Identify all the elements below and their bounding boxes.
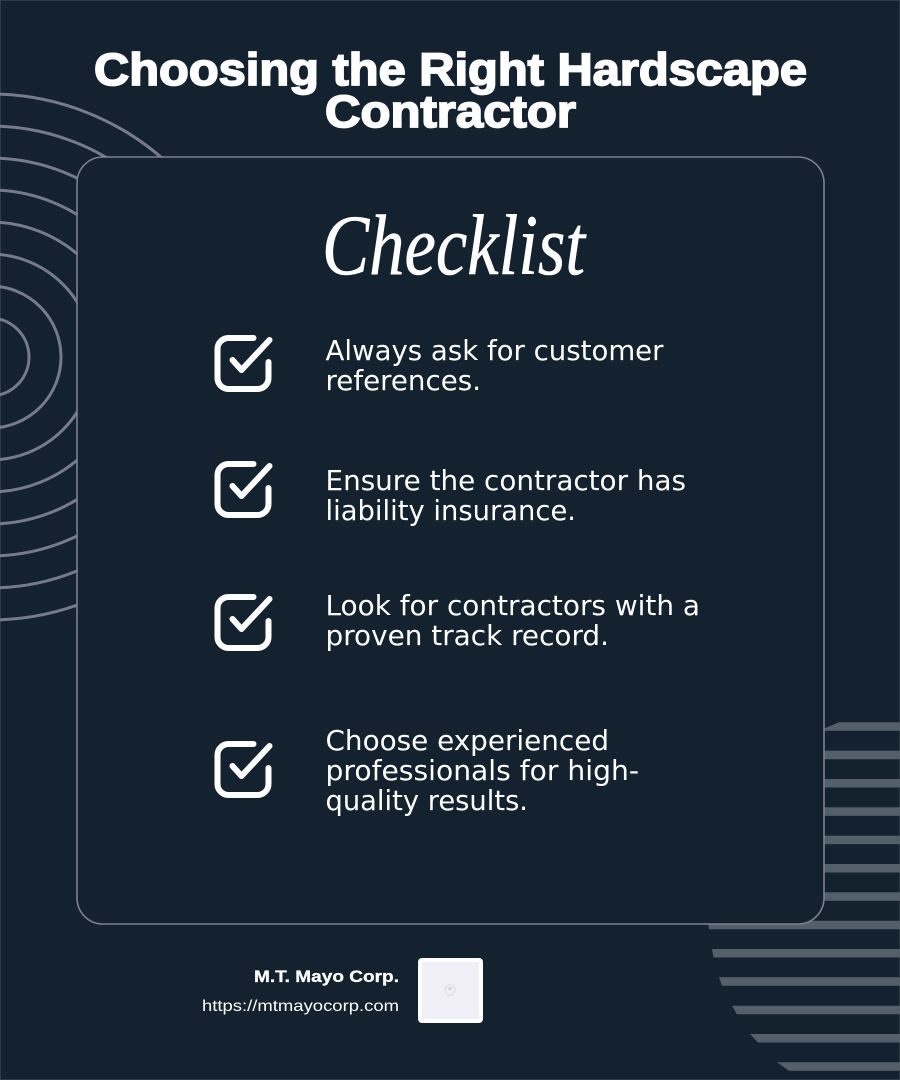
text: item 1 <box>326 334 664 397</box>
footer: company details: M.T. Mayo Corp. <box>254 967 399 986</box>
item 4 <box>218 724 639 817</box>
item 2 <box>218 464 686 527</box>
icon: checkbox 4 <box>218 744 270 795</box>
text: item 3: proven track record. <box>326 619 609 652</box>
text: item 4: quality results. <box>326 784 528 817</box>
icon: checkbox 3 <box>218 597 270 648</box>
icon: checkbox 1 <box>218 338 270 389</box>
title: Contractor <box>325 86 576 137</box>
text: item 2: liability insurance. <box>326 494 576 527</box>
text: item 4 <box>326 724 639 817</box>
item 3 <box>218 589 700 652</box>
text: item 4: Choose experienced <box>326 724 609 757</box>
icon: checkbox 2 <box>218 464 270 515</box>
checklist heading: Checklist <box>322 197 587 293</box>
footer: logo tile <box>418 958 483 1023</box>
text: item 4: professionals for high- <box>326 754 639 787</box>
text: item 2: Ensure the contractor has <box>326 464 686 497</box>
text: item 2 <box>326 464 686 527</box>
footer: company details <box>202 967 399 1015</box>
footer: company details: https://mtmayocorp.com <box>202 998 399 1015</box>
text: item 1: Always ask for customer <box>326 334 664 367</box>
item 1 <box>218 334 664 397</box>
decorative concentric arcs <box>0 94 253 620</box>
title: Choosing the Right Hardscape <box>94 44 807 95</box>
decorative stripes <box>708 722 900 1071</box>
text: item 1: references. <box>326 364 481 397</box>
text: item 3: Look for contractors with a <box>326 589 700 622</box>
title <box>94 44 807 137</box>
panel: checklist <box>77 157 824 924</box>
text: item 3 <box>326 589 700 652</box>
